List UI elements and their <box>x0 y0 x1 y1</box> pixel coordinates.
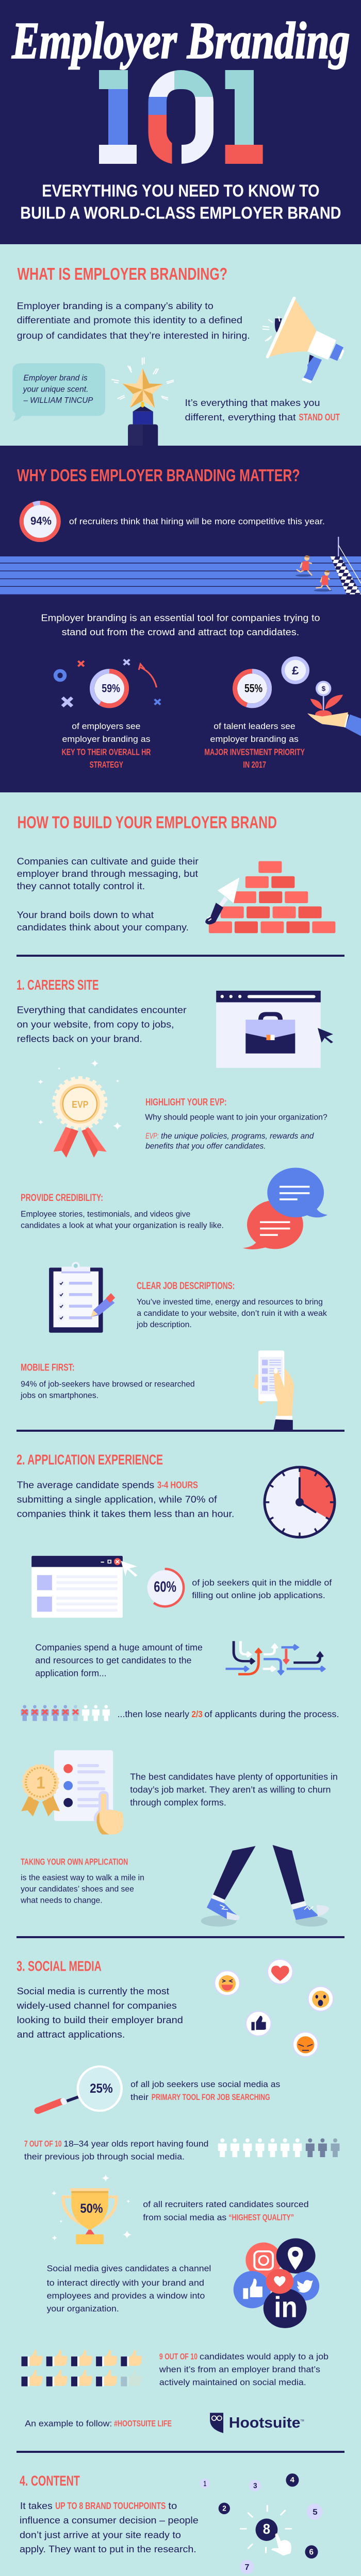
icon: star on pen <box>112 357 174 446</box>
icon: megaphone <box>262 298 344 384</box>
text: essential tool <box>41 613 320 638</box>
text: job seekers stat <box>130 2079 280 2102</box>
text: 9 out of 10: when it’s from an employer brand that’s <box>159 2364 320 2374</box>
icon: reaction bubbles <box>215 1959 333 2057</box>
icon: eight touchpoints: 5 <box>313 2507 318 2517</box>
text: touchpoints: UP TO 8 BRAND TOUCHPOINTS <box>55 2501 166 2512</box>
text: 59 percent caption: of employers see <box>72 721 140 731</box>
text: social media intro: and attract applications. <box>17 2029 125 2040</box>
chart: 60 percent ring: 60% <box>154 1579 176 1595</box>
text: quit stat: filling out online job applications. <box>192 1590 325 1600</box>
text: intro: Your brand boils down to what <box>17 910 154 921</box>
text: mobile first: 94% of job-seekers have browsed or researched <box>21 1380 195 1388</box>
text: interact directly: your organization. <box>47 2303 119 2313</box>
icon: EVP rosette: EVP <box>72 1099 88 1110</box>
text: provide credibility: candidates a look at what your organization is really like. <box>21 1221 224 1230</box>
text: stand out: STAND OUT <box>299 412 340 423</box>
text: mobile first: jobs on smartphones. <box>20 1391 99 1400</box>
text: touchpoints: influence a consumer decision – people <box>20 2515 199 2526</box>
text: job seekers stat: their <box>130 2092 149 2102</box>
text: 9 out of 10: actively maintained on social media. <box>159 2377 306 2387</box>
icon: pound coin <box>282 656 309 684</box>
text: 59 percent caption: employer branding as <box>62 734 151 744</box>
text: companies spend: and resources to get candidates to the <box>35 1655 191 1665</box>
chart: 55 percent donut <box>235 671 269 706</box>
text: mobile first: MOBILE FIRST: <box>21 1363 75 1373</box>
panel: hero <box>11 21 350 219</box>
callout: quote bubble: – WILLIAM TINCUP <box>23 396 93 405</box>
text: example to follow <box>25 2418 172 2428</box>
text: application intro <box>17 1480 234 1519</box>
text: 55 percent caption: employer branding as <box>210 734 299 744</box>
heading: careers site: 1. CAREERS SITE <box>17 977 99 993</box>
text: highlight your EVP: benefits that you offer candidates. <box>145 1142 266 1150</box>
chart: 94 percent donut <box>22 503 59 540</box>
logo: Hootsuite: TM <box>301 2419 304 2422</box>
text: application intro: companies think it takes them less than an hour. <box>17 1509 234 1519</box>
text: careers intro: reflects back on your brand. <box>17 1034 142 1044</box>
text: clear job descriptions: CLEAR JOB DESCRIPTIONS: <box>137 1281 235 1292</box>
chart: 60 percent ring <box>146 1569 184 1606</box>
icon: plant in hand with dollar coin <box>307 681 361 736</box>
text: highlight your EVP: EVP: <box>145 1132 159 1141</box>
icon: eight touchpoints: 8 <box>263 2521 270 2537</box>
icon: eight touchpoints: 3 <box>253 2482 257 2490</box>
text: interact directly <box>47 2263 211 2313</box>
text: 59 percent caption <box>62 721 151 770</box>
icon: document with medal and pointing hand: 1 <box>37 1773 45 1792</box>
text: interact directly: Social media gives candidates a channel <box>47 2263 211 2273</box>
text: careers intro <box>17 1005 187 1044</box>
text: essential tool: Employer branding is an essential tool for companies trying to <box>41 613 320 623</box>
text: quit stat <box>192 1578 332 1600</box>
callout: quote bubble: your unique scent. <box>23 384 88 394</box>
icon: plant in hand with dollar coin: $ <box>322 685 326 692</box>
icon: pound coin: £ <box>292 664 299 677</box>
text: 59 percent caption: STRATEGY <box>90 759 123 770</box>
heading: application experience: 2. APPLICATION EXPERIENCE <box>17 1452 163 1468</box>
subtitle <box>20 181 341 223</box>
text: provide credibility: Employee stories, testimonials, and videos give <box>21 1210 190 1218</box>
icon: browser with briefcase <box>216 991 333 1068</box>
icon: eight touchpoints: 6 <box>309 2548 314 2556</box>
text: job seekers stat: PRIMARY TOOL FOR JOB SEARCHING <box>152 2092 270 2102</box>
text: application intro: The average candidate spends <box>17 1480 154 1490</box>
text: best candidates: today’s job market. They aren’t as willing to churn <box>130 1784 331 1794</box>
icon: social network circles <box>234 2239 319 2328</box>
text: 9 out of 10: 9 OUT OF 10 <box>159 2351 198 2361</box>
text: stand out: It’s everything that makes you <box>185 398 320 409</box>
text: best candidates: through complex forms. <box>130 1797 226 1807</box>
text: stand out: different, everything that <box>185 412 296 423</box>
text: recruiters quality: from social media as <box>143 2212 226 2222</box>
text: recruiters quality <box>143 2199 309 2222</box>
text: definition: Employer branding is a company’s ability to <box>17 301 214 312</box>
icon: eight touchpoints: 2 <box>222 2504 226 2513</box>
graphic: 101 numerals <box>99 67 263 166</box>
text: companies spend: Companies spend a huge amount of time <box>35 1642 203 1652</box>
chart: 55 percent donut: 55% <box>244 682 262 695</box>
text: lose applicants: of applicants during the process. <box>204 1709 339 1719</box>
heading: WHAT IS EMPLOYER BRANDING? <box>17 265 227 284</box>
chart: 59 percent donut: 59% <box>102 682 120 695</box>
text: companies spend <box>35 1642 203 1678</box>
callout: quote bubble: Employer brand is <box>24 373 88 382</box>
icon: hand holding phone <box>254 1350 294 1430</box>
text: 7 out of 10: 18–34 year olds report having found <box>63 2139 208 2148</box>
text: intro: candidates think about your company. <box>17 922 189 933</box>
chart: 59 percent donut <box>92 671 127 706</box>
text: 7 out of 10: 7 OUT OF 10 <box>24 2139 62 2148</box>
text: 7 out of 10: their previous job through social media. <box>24 2151 185 2161</box>
text: intro <box>17 856 199 933</box>
text: social media intro: Social media is currently the most <box>17 1986 170 1997</box>
text: example to follow: An example to follow: <box>25 2418 112 2428</box>
icon: browser window with close cursor <box>31 1556 138 1618</box>
icon: eight touchpoints: 4 <box>290 2476 294 2484</box>
text: lose applicants: 2/3 <box>191 1709 203 1719</box>
text: best candidates <box>130 1771 338 1807</box>
text: definition: group of candidates that they’re interested in hiring. <box>17 330 250 341</box>
text: provide credibility <box>21 1193 224 1230</box>
text: definition: differentiate and promote this identity to a defined <box>17 315 242 326</box>
text: provide credibility: PROVIDE CREDIBILITY: <box>21 1193 103 1204</box>
icon: speech bubbles <box>243 1167 327 1249</box>
text: highlight your EVP: the unique policies, programs, rewards and <box>161 1132 314 1141</box>
text: careers intro: on your website, from copy to jobs, <box>17 1019 174 1030</box>
logo: Hootsuite <box>210 2413 304 2433</box>
text: touchpoints: don’t just arrive at your site ready to <box>20 2530 181 2540</box>
text: intro: Companies can cultivate and guide their <box>17 856 199 867</box>
icon: clipboard and pencil <box>49 1262 115 1333</box>
icon: tangled arrows <box>225 1641 324 1674</box>
text: taking your own application: is the easiest way to walk a mile in <box>21 1873 144 1882</box>
text: stand out <box>185 398 340 423</box>
text: 9 out of 10 <box>159 2351 329 2387</box>
text: taking your own application: your candidates’ shoes and see <box>21 1885 134 1893</box>
icon: EVP rosette <box>38 1060 122 1158</box>
text: mobile first <box>20 1363 195 1400</box>
text: 59 percent caption: KEY TO THEIR OVERALL HR <box>62 747 151 757</box>
callout: quote bubble <box>12 363 105 421</box>
icon: trophy: 50% <box>80 2201 103 2216</box>
icon: social network circles: in <box>274 2291 298 2324</box>
icon: trophy <box>52 2175 132 2244</box>
heading: content: 4. CONTENT <box>20 2473 80 2489</box>
text: 9 out of 10: candidates would apply to a job <box>200 2351 329 2361</box>
chart: 94 percent donut: 94% <box>30 514 52 528</box>
text: touchpoints: to <box>168 2501 177 2512</box>
panel: how to build <box>0 792 361 2576</box>
text: taking your own application: what needs to change. <box>20 1896 103 1905</box>
text: application intro: 3-4 HOURS <box>157 1480 198 1490</box>
text: best candidates: The best candidates have plenty of opportunities in <box>130 1771 338 1782</box>
icon: people crossed out <box>21 1705 110 1721</box>
icon: ten people <box>218 2138 339 2157</box>
icon: brick pyramid and trowel <box>205 861 335 933</box>
icon: eight touchpoints <box>200 2473 323 2574</box>
panel: why does employer branding matter <box>0 446 361 792</box>
text: lose applicants <box>118 1709 339 1719</box>
text: quit stat: of job seekers quit in the middle of <box>192 1578 332 1587</box>
text: clear job descriptions: a candidate to your website, don’t ruin it with a weak <box>137 1309 327 1318</box>
text: touchpoints: apply. They want to put in the research. <box>20 2544 196 2555</box>
icon: walking legs <box>201 1845 329 1926</box>
icon: magnifier with 25 percent <box>38 2066 122 2111</box>
text: job seekers stat: of all job seekers use social media as <box>130 2079 280 2089</box>
text: social media intro: looking to build their employer brand <box>17 2015 183 2026</box>
icon: eight touchpoints: 7 <box>245 2563 249 2572</box>
text: definition <box>17 301 250 341</box>
text: example to follow: #HOOTSUITE LIFE <box>114 2418 172 2428</box>
text: taking your own application: TAKING YOUR OWN APPLICATION <box>21 1856 128 1867</box>
text: 55 percent caption: MAJOR INVESTMENT PRIORITY <box>204 747 305 757</box>
text: 55 percent caption <box>204 721 305 770</box>
text: lose applicants: ...then lose nearly <box>118 1709 190 1719</box>
text: highlight your EVP <box>145 1097 327 1150</box>
text: recruiters quality: “HIGHEST QUALITY” <box>228 2212 294 2222</box>
heading: social media: 3. SOCIAL MEDIA <box>17 1958 102 1974</box>
text: touchpoints: It takes <box>20 2501 53 2512</box>
text: clear job descriptions: job description. <box>136 1320 192 1329</box>
icon: eight touchpoints: 1 <box>204 2480 206 2488</box>
text: social media intro <box>17 1986 183 2040</box>
icon: magnifier with 25 percent: 25% <box>90 2081 113 2096</box>
text: companies spend: application form... <box>35 1668 107 1678</box>
text: recruiters stat: of recruiters think that hiring will be more competitive this year. <box>69 517 325 527</box>
text: highlight your EVP: Why should people want to join your organization? <box>145 1113 327 1122</box>
text: 7 out of 10 <box>24 2139 208 2161</box>
text: clear job descriptions: You’ve invested time, energy and resources to bring <box>137 1298 323 1307</box>
text: application intro: submitting a single application, while 70% of <box>17 1494 217 1505</box>
icon: scattered marks <box>56 659 161 707</box>
icon: clock <box>265 1467 335 1537</box>
text: interact directly: to interact directly with your brand and <box>47 2278 204 2287</box>
graphic: running track <box>0 537 361 595</box>
text: touchpoints <box>20 2501 199 2555</box>
icon: thumbs up grid <box>22 2350 142 2386</box>
text: recruiters quality: of all recruiters rated candidates sourced <box>143 2199 309 2209</box>
text: essential tool: stand out from the crowd and attract top candidates. <box>62 627 299 638</box>
icon: document with medal and pointing hand <box>21 1750 123 1835</box>
text: 55 percent caption: of talent leaders see <box>214 721 296 731</box>
text: intro: they cannot totally control it. <box>17 881 145 892</box>
text: intro: employer brand through messaging, but <box>17 869 198 879</box>
text: taking your own application <box>20 1856 144 1905</box>
text: highlight your EVP: HIGHLIGHT YOUR EVP: <box>145 1097 227 1108</box>
logo: Hootsuite: Hootsuite <box>229 2415 301 2431</box>
panel: what is employer branding <box>0 244 361 446</box>
text: clear job descriptions <box>136 1281 327 1329</box>
text: interact directly: employees and provides a window into <box>47 2291 205 2300</box>
text: social media intro: widely-used channel for companies <box>17 2001 177 2011</box>
text: 55 percent caption: IN 2017 <box>243 759 266 770</box>
text: careers intro: Everything that candidates encounter <box>17 1005 187 1015</box>
